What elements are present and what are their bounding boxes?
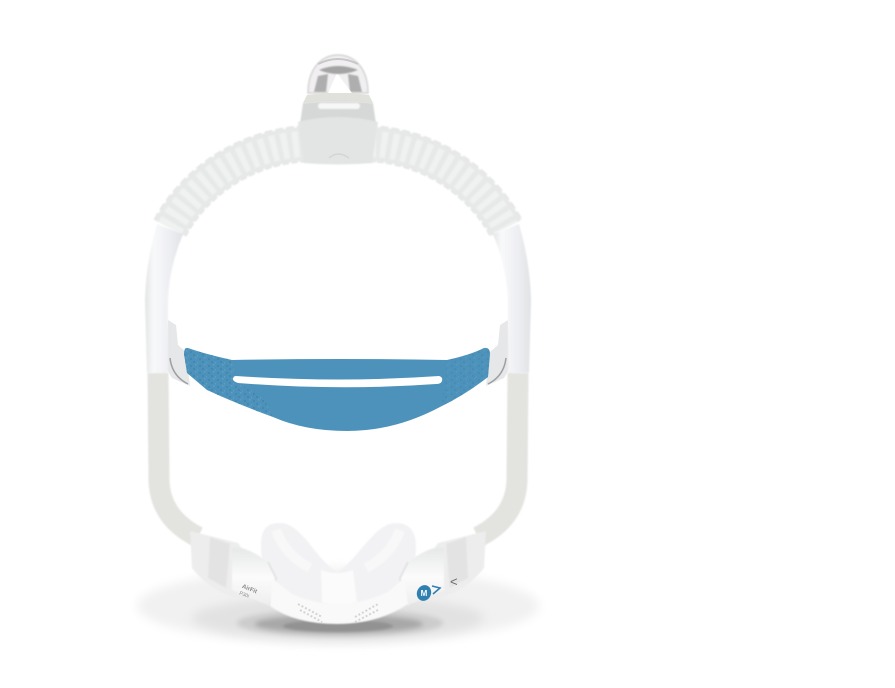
product logo text [238,584,258,602]
product logo text: P30i [238,590,250,600]
air tube: lower fabric sleeves [158,373,518,537]
size badge: M: M [421,589,428,598]
left elbow connector [190,531,276,606]
blue fabric band [184,348,490,431]
air tube: upper smooth arms [145,224,531,373]
product logo text: AirFit [241,584,258,595]
air tube: corrugated crown [170,144,506,228]
size badge: M [414,583,440,603]
ground shadow [137,568,539,644]
elbow swivel connector [298,55,378,164]
right elbow connector [400,531,486,606]
size marker chevron: < [450,574,458,589]
headgear straps behind the band [166,320,510,386]
nasal pillows cushion [261,523,416,612]
mask frame with vents [270,578,408,624]
